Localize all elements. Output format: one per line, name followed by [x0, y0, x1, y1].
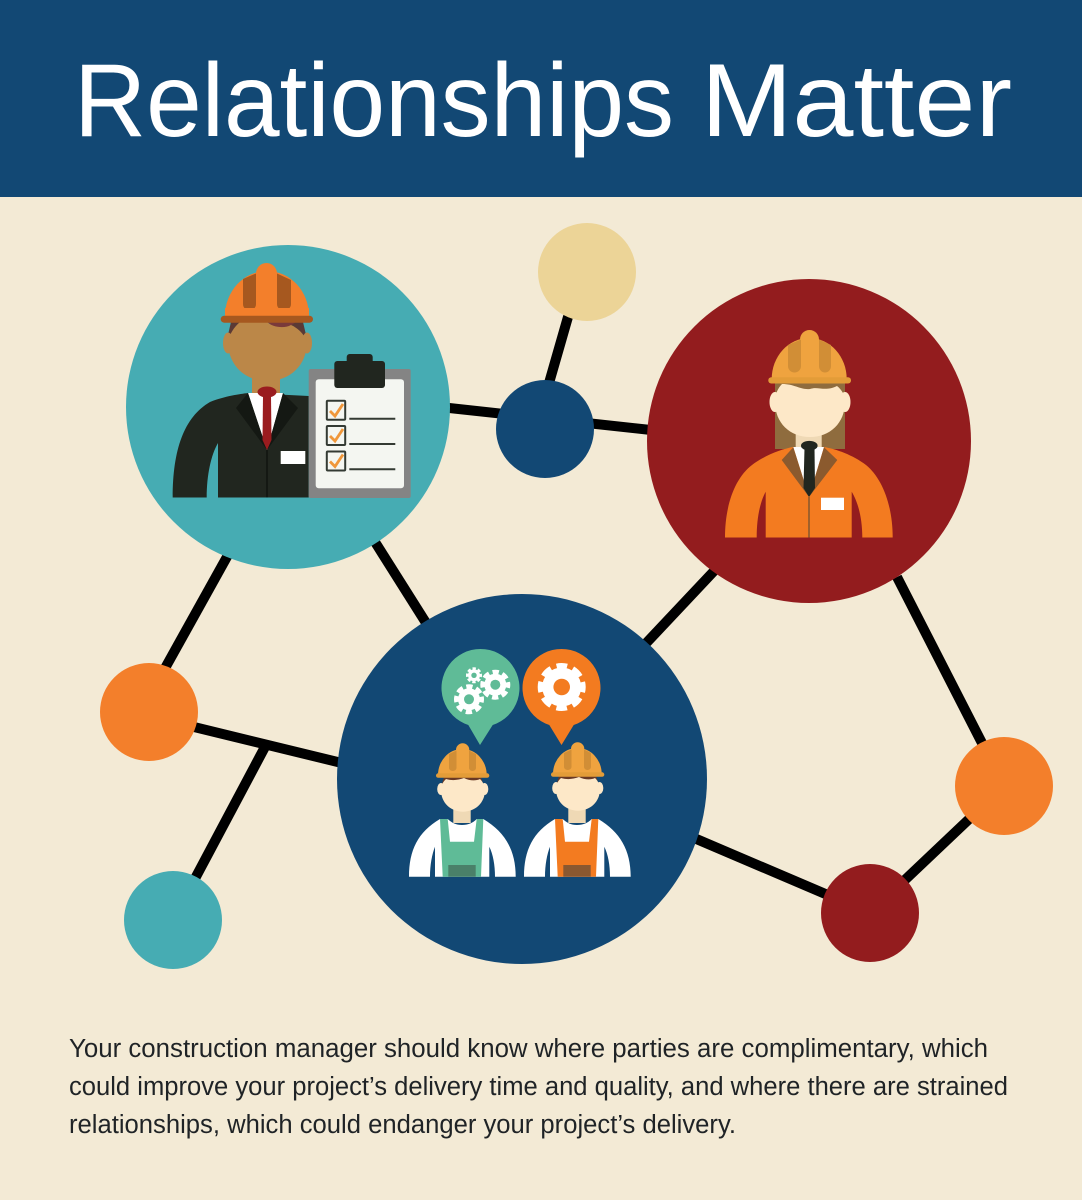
network connector lines: [149, 303, 1004, 920]
title: Matter: [701, 43, 1012, 159]
icon: green speech bubble with gears: [441, 649, 520, 745]
icon: worker in green overalls: [409, 743, 516, 877]
body text: relationships, which could endanger your project’s delivery.: [69, 1111, 736, 1139]
small node: orange right: [955, 737, 1053, 835]
panel: female engineer circle: [647, 279, 971, 603]
icon: manager figure: [173, 263, 313, 498]
body text: Your construction manager should know where parties are complimentary, which: [69, 1035, 988, 1063]
icon: worker in orange overalls: [524, 742, 631, 877]
icon: female engineer figure: [725, 330, 893, 538]
body text: [69, 1035, 1008, 1139]
small node: sand: [538, 223, 636, 321]
panel: manager circle: [126, 245, 450, 569]
small node: dark red: [821, 864, 919, 962]
panel: workers circle: [337, 594, 707, 964]
header banner: [0, 0, 1082, 197]
small node: orange left: [100, 663, 198, 761]
small node: navy: [496, 380, 594, 478]
body text: could improve your project’s delivery time and quality, and where there are strained: [69, 1073, 1008, 1101]
title: [74, 43, 1012, 159]
icon: orange speech bubble with gear: [522, 649, 600, 745]
small node: teal: [124, 871, 222, 969]
title: Relationships: [74, 43, 674, 159]
icon: clipboard checklist: [309, 354, 411, 498]
